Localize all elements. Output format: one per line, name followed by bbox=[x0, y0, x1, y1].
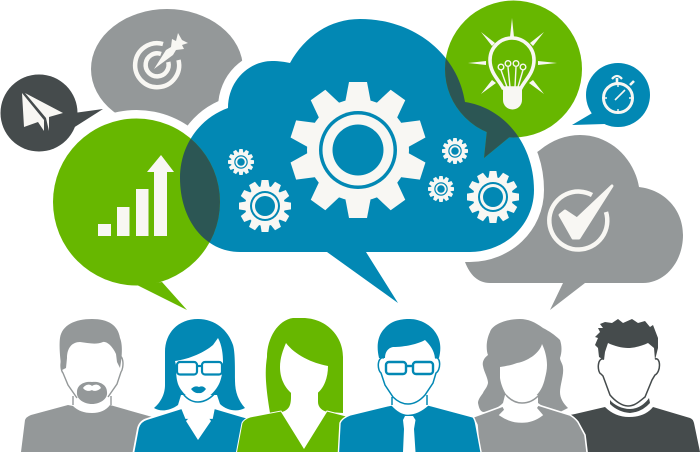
panel: green idea speech bubble bbox=[445, 0, 582, 158]
lips bbox=[191, 386, 206, 393]
icon: medium gear left bbox=[239, 180, 291, 232]
overlap of green bubble and cloud bbox=[180, 138, 220, 242]
jaw outline bbox=[506, 395, 539, 403]
white separation halo bbox=[180, 19, 534, 303]
panel: gray check cloud bbox=[465, 135, 683, 310]
collar band bbox=[610, 398, 650, 413]
neck bbox=[500, 395, 542, 422]
overlap of idea bubble and cloud bbox=[445, 58, 519, 158]
face bbox=[175, 338, 223, 400]
body bbox=[235, 411, 350, 452]
jaw and ears bbox=[598, 359, 660, 406]
icon: medium gear right bbox=[467, 171, 519, 223]
icon: paper plane bbox=[22, 93, 63, 131]
jaw outline bbox=[181, 391, 217, 402]
panel: dark paper plane speech bubble bbox=[0, 74, 103, 152]
icon: rising bar chart with arrow bbox=[98, 155, 174, 236]
body bbox=[473, 405, 588, 452]
icon: target with dart bbox=[135, 33, 188, 87]
hair bbox=[595, 319, 658, 360]
icon: small gear lower right bbox=[428, 176, 454, 202]
glasses bbox=[177, 362, 222, 374]
person: green woman bbox=[235, 318, 350, 452]
tie bbox=[403, 416, 416, 452]
person: dark spiky-haired man bbox=[570, 319, 700, 452]
icon: stopwatch bbox=[604, 76, 634, 112]
jacket bbox=[132, 408, 252, 452]
glasses bbox=[386, 362, 433, 374]
panel: gray target speech bubble bbox=[91, 9, 243, 129]
face bbox=[500, 344, 547, 402]
person: gray curly-haired woman bbox=[473, 319, 588, 452]
hair bbox=[60, 319, 122, 370]
neck and blouse bbox=[181, 396, 217, 440]
hair bbox=[378, 319, 440, 358]
icon: check mark in circle bbox=[549, 186, 612, 250]
icon: large gear bbox=[289, 82, 427, 218]
jaw and ears bbox=[61, 356, 123, 405]
panel: blue gears cloud bbox=[180, 19, 534, 303]
icon: light bulb with rays bbox=[468, 18, 557, 110]
jaw and ears bbox=[378, 358, 440, 405]
beard bbox=[77, 382, 107, 404]
icon: small gear left bbox=[228, 149, 254, 175]
person: blue man with glasses and tie bbox=[338, 319, 481, 452]
mouth gap bbox=[83, 385, 101, 391]
person: blue woman with glasses bbox=[132, 319, 252, 452]
face bbox=[280, 343, 328, 398]
icon: small gear upper right bbox=[442, 138, 468, 164]
panel: green growth speech bubble bbox=[53, 118, 220, 310]
person: bearded man bbox=[20, 319, 156, 452]
panel: blue stopwatch speech bubble bbox=[572, 63, 650, 127]
